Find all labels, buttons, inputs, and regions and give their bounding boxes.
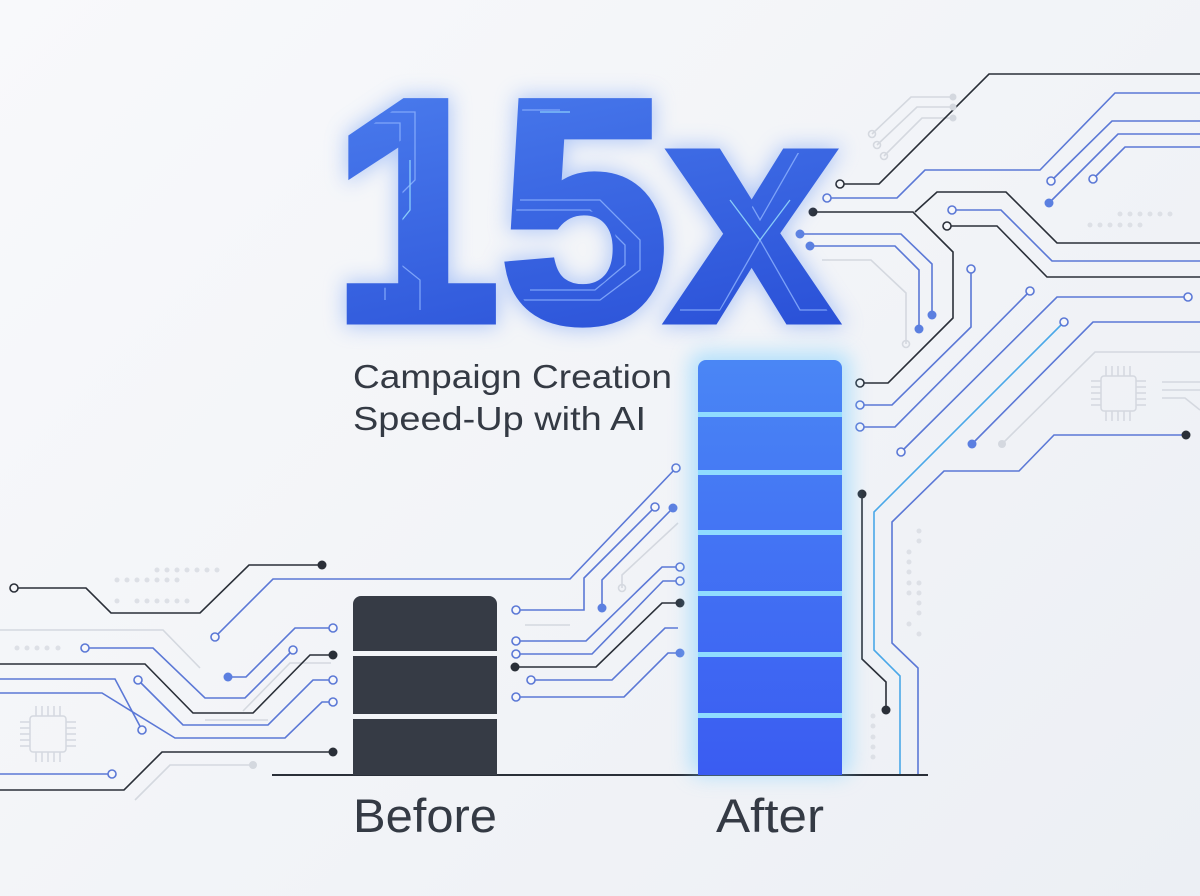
title: 15x: 15x	[332, 34, 838, 387]
subtitle	[353, 358, 672, 437]
bar: before	[353, 596, 497, 775]
icon: chip right	[1091, 366, 1146, 421]
subtitle: Campaign Creation	[353, 358, 672, 395]
subtitle: Speed-Up with AI	[353, 400, 646, 437]
label: Before: Before	[353, 789, 497, 842]
circuit endpoints	[10, 94, 1192, 778]
baseline	[272, 774, 928, 776]
label: After: After	[716, 789, 824, 842]
decorative dot rows	[14, 212, 1172, 760]
title: 15x: 15x	[332, 34, 838, 387]
right upper	[822, 97, 1200, 444]
middle	[516, 507, 655, 610]
bar: after	[690, 352, 850, 776]
icon: chip left	[20, 706, 76, 762]
